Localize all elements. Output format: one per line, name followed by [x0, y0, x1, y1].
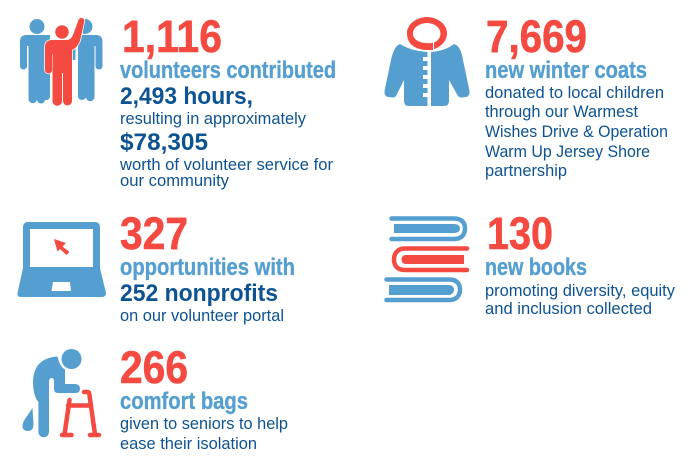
text: worth of volunteer service: worth of volunteer service for [119, 156, 334, 174]
text: our community: our community [120, 172, 230, 190]
text: resulting in approximately: resulting in approximately [120, 110, 307, 128]
icon: laptop [17, 222, 106, 297]
text: given to seniors to help: given to seniors to help [120, 415, 288, 433]
icon: winter coat [384, 17, 470, 106]
number: 7,669: 7,669 [486, 11, 587, 62]
icon: book stack [386, 218, 467, 300]
text: promoting diversity, equity: promoting diversity, equity [485, 282, 676, 300]
text: through our Warmest: through our Warmest [485, 103, 638, 121]
icon: senior with walker [22, 349, 99, 437]
number: 1,116: 1,116 [122, 11, 222, 62]
highlight: 2,493 hours: 2,493 hours, [120, 83, 253, 110]
text: on our volunteer portal: on our volunteer portal [120, 307, 284, 325]
icon: volunteers group [20, 18, 102, 106]
subheading: volunteers contributed: volunteers contributed [120, 57, 336, 84]
highlight: 252 nonprofits: 252 nonprofits [120, 280, 278, 307]
number: 327: 327 [120, 208, 188, 259]
subheading: new books: new books [485, 254, 587, 281]
panel: volunteers [20, 11, 336, 190]
icon: cursor [54, 239, 70, 255]
text: donated to local children: donated to local children [485, 84, 664, 102]
text: Warm Up Jersey Shore: Warm Up Jersey Shore [485, 143, 650, 161]
subheading: new winter coats: new winter coats [485, 57, 647, 84]
text: and inclusion collected: and inclusion collected [485, 300, 652, 318]
highlight: $78,305: $78,305 [120, 129, 208, 156]
number: 266: 266 [120, 342, 188, 393]
panel: comfort bags [22, 342, 288, 453]
panel: coats [384, 11, 668, 180]
text: Wishes Drive and Operation: Wishes Drive & Operation [485, 123, 668, 141]
subheading: opportunities with: opportunities with [120, 254, 295, 281]
panel: books [386, 208, 676, 318]
subheading: comfort bags: comfort bags [120, 388, 248, 415]
text: ease their isolation: ease their isolation [120, 435, 257, 453]
text: partnership: partnership [485, 162, 567, 180]
panel: opportunities [17, 208, 295, 325]
number: 130: 130 [487, 208, 553, 259]
